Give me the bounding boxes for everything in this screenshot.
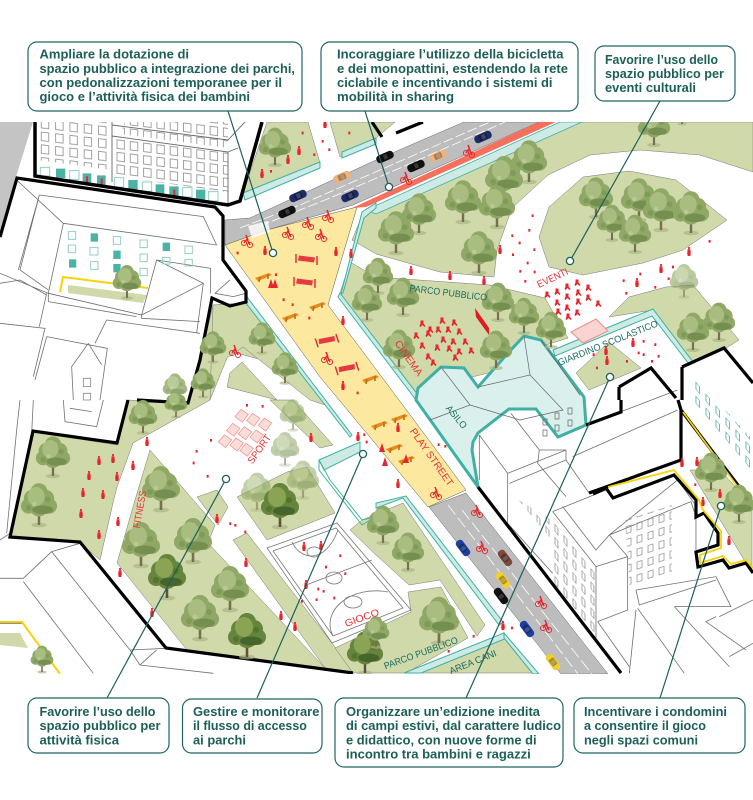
- map labels: red activities: PLAY STREET: [407, 427, 455, 489]
- callout box: flusso di accesso: Gestire e monitorare: [193, 704, 319, 719]
- callout box: Incoraggiare: [321, 42, 578, 111]
- seats: events and cinema: [414, 280, 602, 366]
- callout box: attività fisica: attività fisica: [40, 732, 120, 748]
- buildings: east blocks: [479, 390, 753, 673]
- play street benches and tables: [255, 254, 415, 466]
- callout box: flusso di accesso: [182, 699, 322, 753]
- callout box: Incoraggiare: e dei monopattini, estendendo la rete: [337, 61, 568, 76]
- callout line: access flow: [257, 450, 367, 698]
- play street: [225, 207, 466, 507]
- trees: [21, 98, 753, 675]
- thick black block outlines: [0, 122, 753, 673]
- map labels: red activities: CINEMA: [392, 339, 425, 379]
- sport training mats: [218, 409, 272, 456]
- map labels: teal places: AREA CANI: [448, 648, 498, 677]
- callout box: condomini: a consentire il gioco: [584, 718, 706, 733]
- callout box: campi estivi: [335, 698, 563, 767]
- buildings: top block: [40, 122, 246, 204]
- event stage: [571, 319, 608, 343]
- teal park fences: [243, 138, 693, 674]
- map labels: teal places: GIARDINO SCOLASTICO: [556, 319, 660, 369]
- callout box: eventi culturali: [595, 46, 735, 101]
- map labels: teal places: PARCO PUBBLICO: [383, 635, 460, 672]
- cars: [277, 130, 562, 672]
- cyclists: [229, 145, 552, 633]
- callout box: flusso di accesso: il flusso di accesso: [193, 718, 307, 733]
- map labels: red activities: GIOCO: [343, 607, 381, 630]
- callout box: condomini: negli spazi comuni: [584, 732, 698, 748]
- red activity specks: [511, 214, 711, 369]
- map labels: red activities: EVENTI: [536, 267, 570, 291]
- map labels: teal places: [383, 283, 660, 677]
- callout box: Ampliare: [28, 42, 302, 111]
- people: [79, 119, 731, 631]
- callout box: campi estivi: di campi estivi, dal carattere ludico: [346, 718, 561, 733]
- map labels: red activities: SPORT: [246, 433, 274, 466]
- callout box: Incoraggiare: mobilità in sharing: [337, 89, 454, 104]
- callout box: campi estivi: incontro tra bambini e ragazzi: [346, 746, 531, 762]
- map labels: red activities: [132, 267, 570, 630]
- upper road with cycle lane: [225, 122, 582, 245]
- map labels: teal places: PARCO PUBBLICO: [409, 283, 488, 304]
- callout box: campi estivi: Organizzare un’edizione inedita: [346, 704, 541, 719]
- buildings: west block roofs: [0, 180, 246, 400]
- callout box: condomini: [574, 698, 745, 753]
- callout box: eventi culturali: eventi culturali: [605, 80, 696, 95]
- callout line: condominiums: [660, 502, 725, 698]
- building: Asilo: [416, 336, 586, 487]
- grey context corner: [0, 122, 33, 237]
- callout box: attività fisica: spazio pubblico per: [40, 718, 160, 733]
- callout box: eventi culturali: spazio pubblico per: [605, 66, 724, 81]
- window grids east: [510, 350, 753, 634]
- callout line: cycling: [365, 111, 393, 191]
- callout box: eventi culturali: Favorire l’uso dello: [605, 52, 718, 67]
- lower road: [429, 493, 608, 674]
- callout box: Incoraggiare: ciclabile e incentivando i sistemi di: [337, 75, 552, 90]
- callout line: summer camps: [466, 373, 614, 698]
- callout box: campi estivi: e didattico, con nuove forme di: [346, 732, 537, 748]
- map labels: teal places: ASILO: [443, 404, 469, 431]
- Asilo roof lines: [430, 336, 580, 436]
- callout box: flusso di accesso: ai parchi: [193, 732, 246, 748]
- callout box: Ampliare: Ampliare la dotazione di: [40, 46, 189, 62]
- red specks southwest and play street: [193, 132, 696, 653]
- map labels: red activities: FITNESS: [132, 490, 149, 529]
- buildings: southwest block roofs: [0, 400, 213, 673]
- callout box: Ampliare: spazio pubblico a integrazione dei parchi,: [40, 61, 295, 76]
- callout box: Ampliare: con pedonalizzazioni temporanee per il: [40, 75, 282, 90]
- courtyard fence and green: [0, 277, 148, 674]
- callout box: Ampliare: gioco e l’attività fisica dei bambini: [40, 89, 250, 104]
- red cinema screen: [475, 308, 489, 335]
- callout box: condomini: Incentivare i condomini: [584, 704, 727, 719]
- green park areas: [11, 122, 753, 673]
- callout line: physical activity: [107, 475, 230, 698]
- callout line: park expansion: [228, 111, 277, 257]
- callout box: attività fisica: [28, 698, 169, 753]
- map: axonometric neighbourhood: [0, 98, 753, 677]
- callout line: cultural events: [566, 101, 660, 265]
- yellow shared courtyard edges: [608, 412, 753, 568]
- callout box: attività fisica: Favorire l’uso dello: [40, 704, 156, 719]
- callout box: Incoraggiare: Incoraggiare l’utilizzo della bicicletta: [337, 46, 564, 62]
- basketball court: [267, 523, 411, 643]
